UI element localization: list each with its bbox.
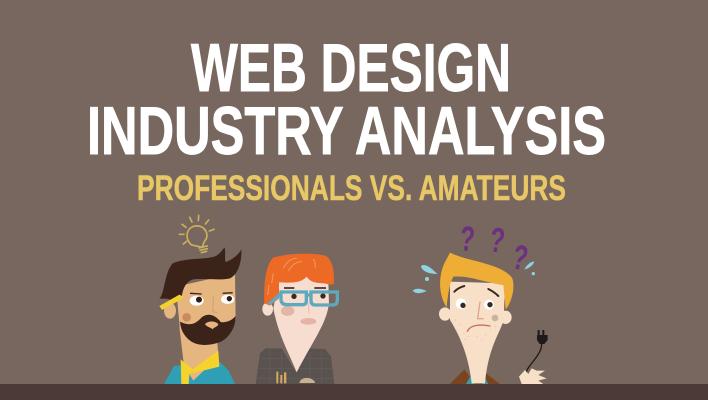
beard xyxy=(180,315,236,345)
ears xyxy=(439,307,451,321)
hair xyxy=(264,254,334,306)
eyebrows xyxy=(284,285,326,290)
nose xyxy=(213,296,218,313)
cheek xyxy=(182,313,191,322)
eyebrows xyxy=(190,293,233,294)
icon: unplugged cable xyxy=(526,330,548,378)
cheek xyxy=(281,306,294,316)
pocket items xyxy=(276,372,286,383)
eyes xyxy=(456,298,466,309)
question marks xyxy=(458,220,531,279)
question marks: ? xyxy=(458,220,476,259)
hair xyxy=(440,253,513,309)
pencil xyxy=(159,295,183,310)
character: red-haired professional with glasses xyxy=(256,254,337,384)
face xyxy=(176,273,236,330)
jacket xyxy=(256,348,334,384)
freckles xyxy=(455,320,496,340)
jacket xyxy=(450,369,500,384)
eyes xyxy=(291,294,297,299)
cheek xyxy=(492,315,498,321)
ear xyxy=(164,303,176,319)
hair strands xyxy=(268,258,315,295)
question marks: ? xyxy=(487,221,507,261)
neck xyxy=(179,327,218,381)
collar xyxy=(466,377,488,384)
character: confused amateur xyxy=(413,220,548,384)
glasses xyxy=(269,292,337,305)
mouth xyxy=(205,321,218,329)
character: bearded professional with lightbulb xyxy=(159,215,241,384)
ear xyxy=(262,302,273,316)
lips xyxy=(300,318,316,325)
scarf xyxy=(181,351,219,384)
hair xyxy=(159,247,241,302)
nose xyxy=(478,302,484,319)
title: WEB DESIGN xyxy=(191,30,511,106)
ground bar xyxy=(0,384,708,400)
shirt xyxy=(164,361,235,384)
icon: lightbulb idea xyxy=(179,215,214,253)
jacket check pattern xyxy=(258,349,334,384)
hand xyxy=(519,368,547,384)
eyes xyxy=(190,296,204,306)
nose xyxy=(307,303,310,313)
sweat drops xyxy=(413,261,535,293)
title xyxy=(87,30,606,169)
mouth xyxy=(467,325,490,331)
face xyxy=(450,282,505,383)
face xyxy=(273,277,329,372)
subtitle: PROFESSIONALS VS. AMATEURS xyxy=(137,169,566,208)
question marks: ? xyxy=(509,238,531,279)
eyebrows xyxy=(454,286,498,296)
